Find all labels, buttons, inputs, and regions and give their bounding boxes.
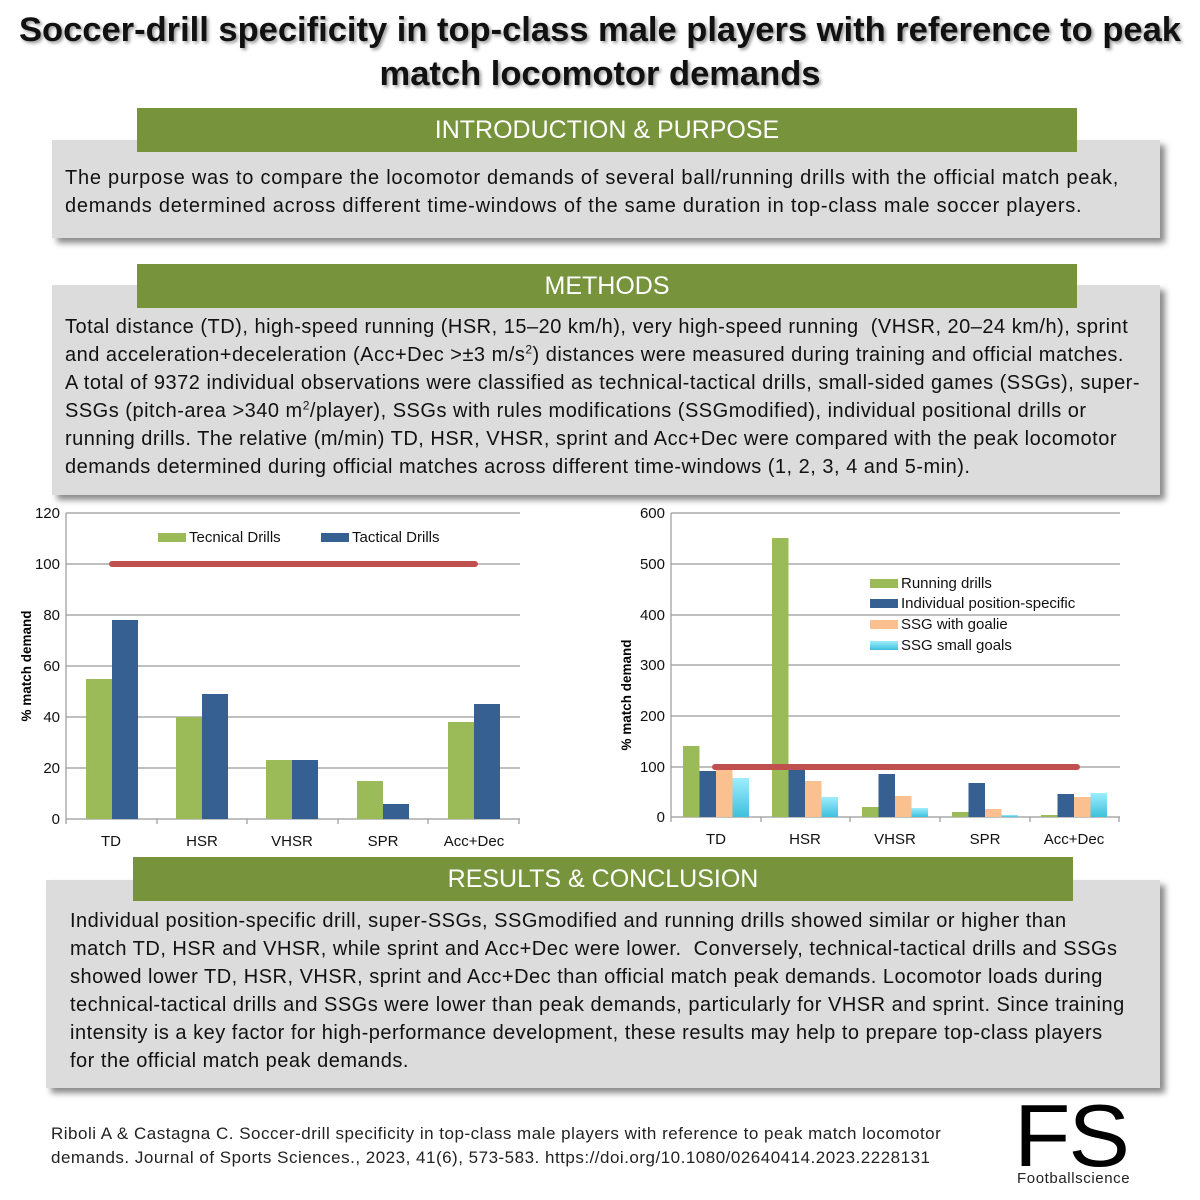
methods text: demands determined during official matches across different time-windows (1, 2, 3, 4 and 5-min). (65, 456, 970, 478)
legend: Tecnical Drills (189, 529, 281, 546)
citation (51, 1124, 941, 1167)
panel: introduction (52, 140, 1160, 238)
chart: running / position-specific / SSG drills: 400 (640, 607, 665, 624)
chart: technical vs tactical drills: 80 (43, 607, 60, 624)
heading: methods: METHODS (544, 272, 670, 300)
chart: technical vs tactical drills: % match demand (19, 610, 34, 722)
chart: running / position-specific / SSG drills: 600 (640, 505, 665, 522)
title: match locomotor demands (380, 55, 820, 93)
heading: methods (137, 264, 1077, 308)
title (19, 11, 1184, 93)
citation: Riboli A & Castagna C. Soccer-drill specificity in top-class male players with reference to peak match locomotor (51, 1124, 941, 1143)
citation: demands. Journal of Sports Sciences., 2023, 41(6), 573-583. https://doi.org/10.1080/02640414.2023.2228131 (51, 1148, 930, 1167)
chart: running / position-specific / SSG drills: 300 (640, 657, 665, 674)
chart: running / position-specific / SSG drills: VHSR (874, 831, 916, 848)
title: Soccer-drill specificity in top-class male players with reference to peak (19, 11, 1181, 49)
chart: running / position-specific / SSG drills: 100 (640, 759, 665, 776)
intro text: demands determined across different time-windows of the same duration in top-class male soccer players. (65, 195, 1082, 217)
chart: technical vs tactical drills: 20 (43, 760, 60, 777)
methods text: Total distance (TD), high-speed running (HSR, 15–20 km/h), very high-speed running (VHSR, 20–24 km/h), sprint (65, 316, 1128, 338)
chart: running / position-specific / SSG drills: HSR (789, 831, 821, 848)
heading: results & conclusion: RESULTS & CONCLUSION (448, 865, 758, 893)
methods text: SSGs (pitch-area >340 m2/player), SSGs with rules modifications (SSGmodified), individual positional drills or (65, 398, 1087, 422)
results text: match TD, HSR and VHSR, while sprint and Acc+Dec were lower. Conversely, technical-tactical drills and SSGs (70, 938, 1118, 960)
results text (70, 910, 1125, 1072)
legend (158, 529, 440, 546)
chart: technical vs tactical drills: 120 (35, 505, 60, 522)
bars (683, 538, 1107, 817)
chart: technical vs tactical drills: 0 (52, 811, 60, 828)
chart: running / position-specific / SSG drills: 200 (640, 708, 665, 725)
legend: Tactical Drills (352, 529, 440, 546)
chart: technical vs tactical drills: 40 (43, 709, 60, 726)
intro text: The purpose was to compare the locomotor demands of several ball/running drills with the official match peak, (65, 167, 1119, 189)
methods text (65, 316, 1140, 478)
intro text (65, 167, 1119, 217)
match peak line (112, 561, 475, 567)
panel: methods (52, 285, 1160, 495)
chart: running / position-specific / SSG drills: TD (706, 831, 726, 848)
chart: technical vs tactical drills: TD (101, 833, 121, 850)
results text: showed lower TD, HSR, VHSR, sprint and Acc+Dec than official match peak demands. Locomotor loads during (70, 966, 1103, 988)
logo: Footballscience: FS (1014, 1086, 1128, 1185)
chart: running / position-specific / SSG drills: % match demand (619, 639, 634, 751)
methods text: A total of 9372 individual observations were classified as technical-tactical drills, small-sided games (SSGs), super- (65, 372, 1140, 394)
results text: Individual position-specific drill, super-SSGs, SSGmodified and running drills showed similar or higher than (70, 910, 1067, 932)
legend: Individual position-specific (901, 595, 1076, 612)
chart: technical vs tactical drills: HSR (186, 833, 218, 850)
results text: for the official match peak demands. (70, 1050, 409, 1072)
results text: intensity is a key factor for high-performance development, these results may help to prepare top-class players (70, 1022, 1103, 1044)
chart: technical vs tactical drills: 100 (35, 556, 60, 573)
chart: running / position-specific / SSG drills: Acc+Dec (1044, 831, 1105, 848)
legend: SSG with goalie (901, 616, 1008, 633)
heading: results & conclusion (133, 857, 1073, 901)
chart: running / position-specific / SSG drills: SPR (970, 831, 1001, 848)
chart: technical vs tactical drills: VHSR (271, 833, 313, 850)
chart: technical vs tactical drills: 60 (43, 658, 60, 675)
chart: technical vs tactical drills (19, 505, 520, 850)
heading: introduction & purpose (137, 108, 1077, 152)
methods text: running drills. The relative (m/min) TD, HSR, VHSR, sprint and Acc+Dec were compared with the peak locomotor (65, 428, 1117, 450)
logo: Footballscience: Footballscience (1017, 1170, 1130, 1187)
heading: introduction & purpose: INTRODUCTION & PURPOSE (435, 116, 779, 144)
legend: SSG small goals (901, 637, 1012, 654)
chart: running / position-specific / SSG drills: 500 (640, 556, 665, 573)
chart: running / position-specific / SSG drills: 0 (657, 809, 665, 826)
results text: technical-tactical drills and SSGs were lower than peak demands, particularly for VHSR and sprint. Since training (70, 994, 1125, 1016)
match peak line (715, 764, 1077, 770)
chart: technical vs tactical drills: SPR (368, 833, 399, 850)
panel: results & conclusion (46, 880, 1160, 1088)
legend (870, 575, 1076, 654)
methods text: and acceleration+deceleration (Acc+Dec >±3 m/s2) distances were measured during training and official matches. (65, 342, 1124, 366)
chart: running / position-specific / SSG drills (619, 505, 1120, 848)
chart: technical vs tactical drills: Acc+Dec (444, 833, 505, 850)
bars (86, 620, 500, 819)
legend: Running drills (901, 575, 992, 592)
